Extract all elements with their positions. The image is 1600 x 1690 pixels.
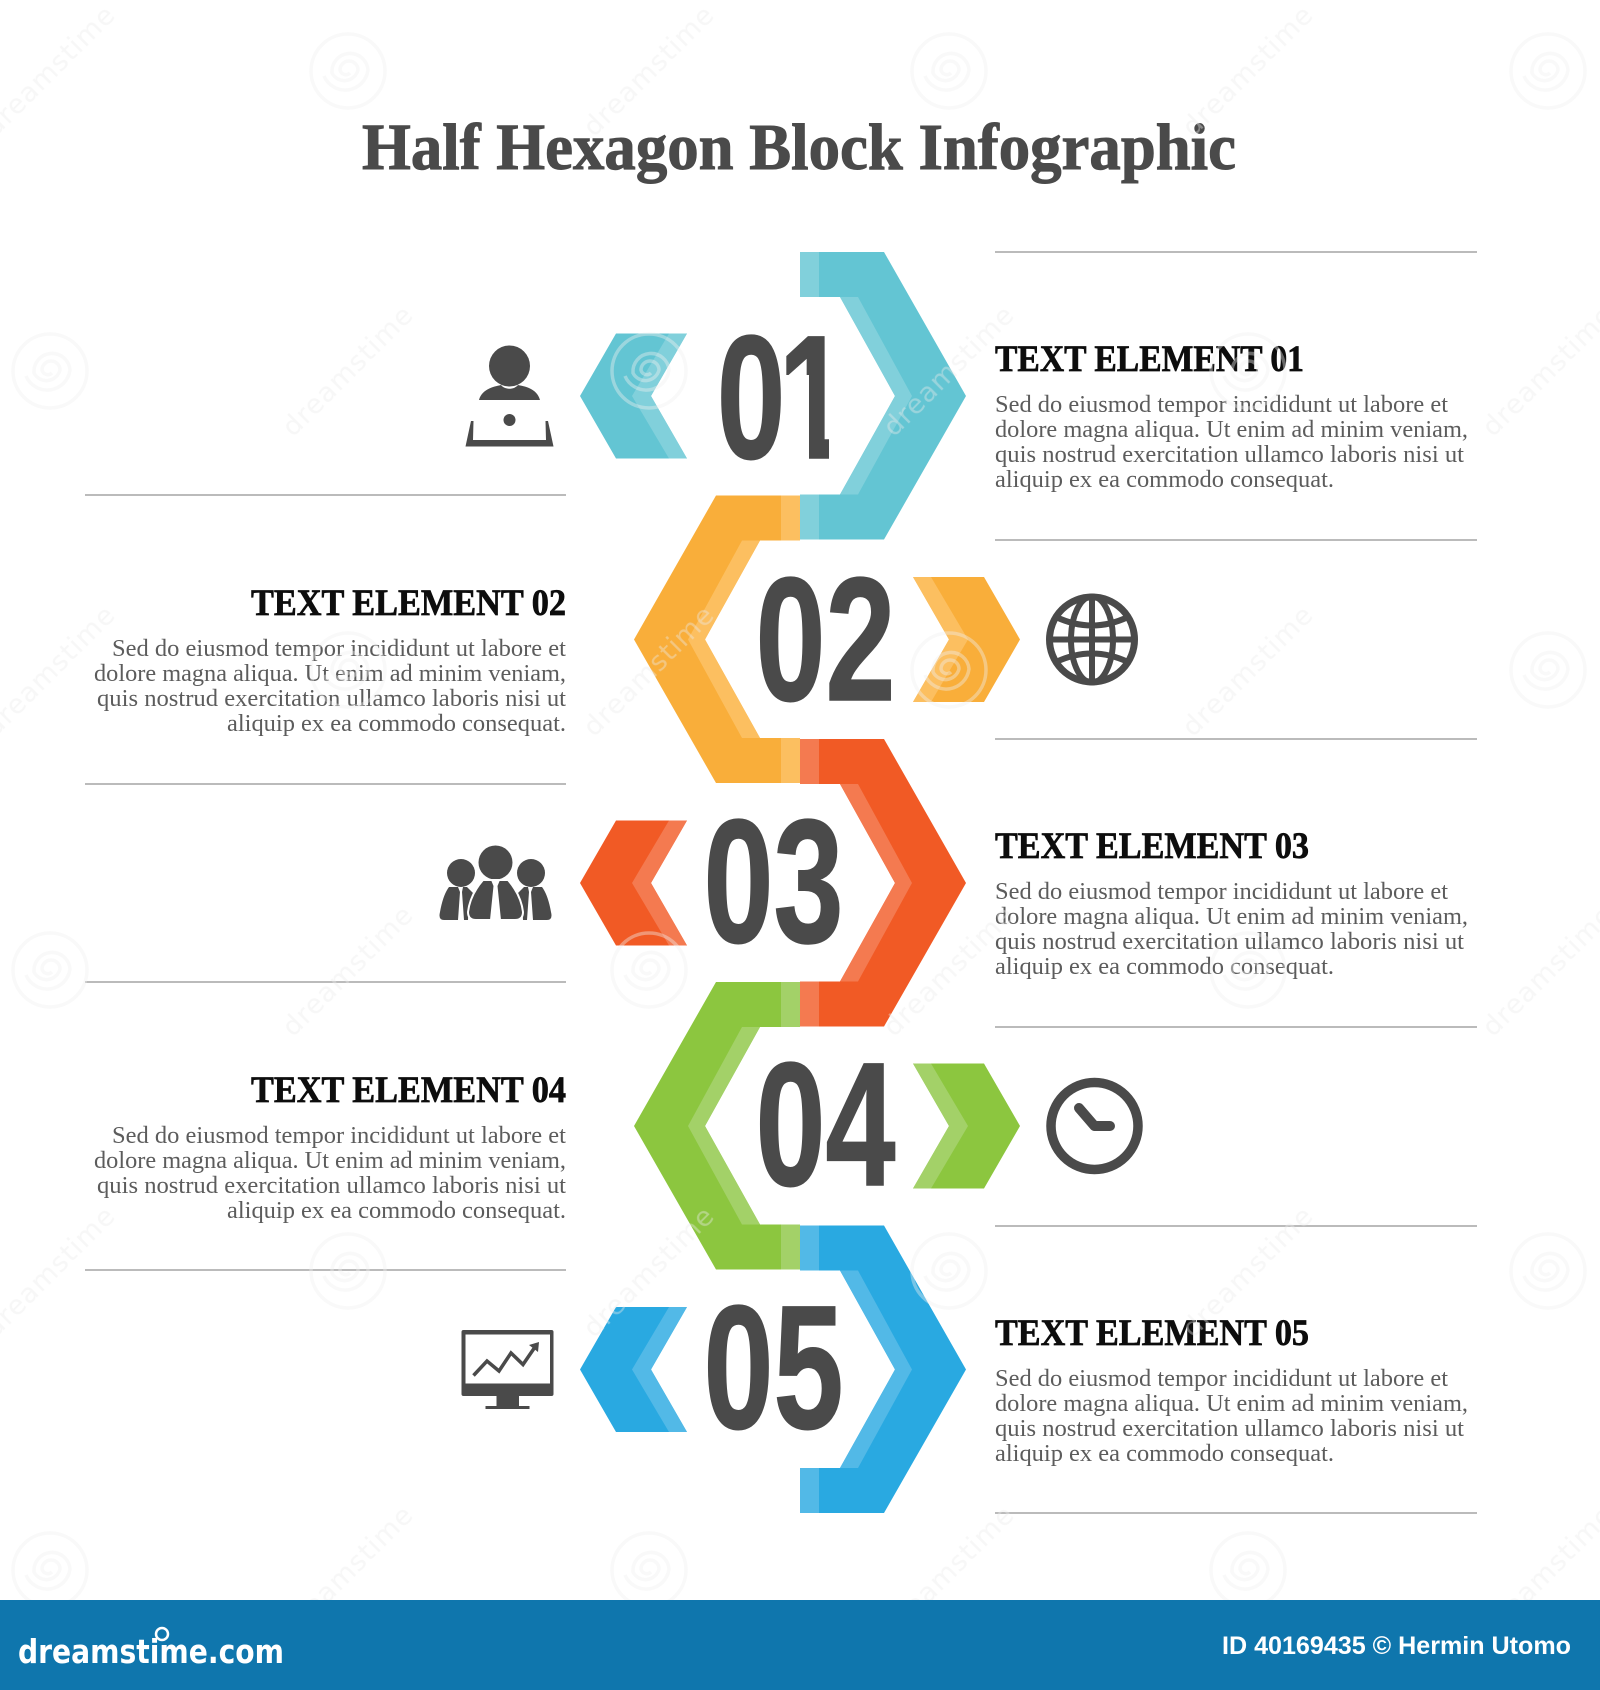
hexagon bracket 04: [634, 982, 800, 1270]
text element 05: aliquip ex ea commodo consequat.: [995, 1441, 1334, 1467]
panel: step 03: [440, 739, 1468, 1026]
text element 04: Sed do eiusmod tempor incididunt ut labore et: [112, 1123, 566, 1149]
text element 01: quis nostrud exercitation ullamco laboris nisi ut: [995, 442, 1464, 468]
text element 04: aliquip ex ea commodo consequat.: [227, 1198, 566, 1224]
text element 02: [94, 583, 566, 737]
text element 03: Sed do eiusmod tempor incididunt ut labore et: [995, 879, 1448, 905]
number 04: 04: [756, 1027, 895, 1223]
text element 03: TEXT ELEMENT 03: [995, 826, 1309, 867]
text element 02: quis nostrud exercitation ullamco laboris nisi ut: [97, 686, 566, 712]
text element 03: quis nostrud exercitation ullamco laboris nisi ut: [995, 929, 1464, 955]
text element 05: Sed do eiusmod tempor incididunt ut labore et: [995, 1366, 1448, 1392]
icon: monitor with chart: [462, 1330, 554, 1409]
text element 04: quis nostrud exercitation ullamco laboris nisi ut: [97, 1173, 566, 1199]
watermark text: dreamstime: [877, 899, 1021, 1043]
title: Half Hexagon Block Infographic: [362, 111, 1236, 184]
watermark text: dreamstime: [577, 1200, 721, 1344]
number 01: [717, 299, 853, 496]
chevron 04: [913, 1064, 1020, 1188]
footer credit: ID 40169435 © Hermin Utomo: [1222, 1632, 1571, 1660]
icon: business team: [440, 846, 552, 920]
text element 01: dolore magna aliqua. Ut enim ad minim veniam,: [995, 417, 1468, 443]
text element 02: dolore magna aliqua. Ut enim ad minim veniam,: [94, 661, 566, 687]
hexagon bracket 05: [800, 1226, 966, 1513]
watermark text: dreamstime: [1176, 1200, 1320, 1344]
text element 03: aliquip ex ea commodo consequat.: [995, 954, 1334, 980]
chevron 02: [913, 577, 1020, 702]
text element 02: TEXT ELEMENT 02: [251, 583, 566, 624]
text element 03: dolore magna aliqua. Ut enim ad minim veniam,: [995, 904, 1468, 930]
chevron 05: [580, 1307, 687, 1432]
text element 05: TEXT ELEMENT 05: [995, 1313, 1309, 1354]
hexagon bracket 02: [634, 496, 800, 783]
text element 01: aliquip ex ea commodo consequat.: [995, 467, 1334, 493]
watermark text: dreamstime: [877, 1499, 1021, 1643]
text element 01: [995, 339, 1468, 493]
watermark text: dreamstime: [1176, 599, 1320, 743]
text element 03: [995, 826, 1468, 980]
hexagon bracket 01: [800, 252, 966, 540]
watermark text: dreamstime: [577, 0, 721, 143]
text element 01: Sed do eiusmod tempor incididunt ut labore et: [995, 392, 1448, 418]
hexagon bracket 03: [800, 739, 966, 1026]
icon: clock: [1051, 1082, 1138, 1170]
panel: step 01: [466, 252, 1468, 540]
number 02: 02: [756, 542, 895, 738]
panel: step 05: [462, 1226, 1468, 1513]
text element 02: Sed do eiusmod tempor incididunt ut labore et: [112, 636, 566, 662]
text element 04: dolore magna aliqua. Ut enim ad minim veniam,: [94, 1148, 566, 1174]
text element 01: TEXT ELEMENT 01: [995, 339, 1304, 380]
watermark text: dreamstime: [1176, 0, 1320, 143]
watermark text: dreamstime: [276, 899, 420, 1043]
number 03: 03: [704, 784, 843, 980]
text element 02: aliquip ex ea commodo consequat.: [227, 711, 566, 737]
watermark text: dreamstime: [877, 299, 1021, 443]
chevron 03: [580, 820, 687, 946]
text element 05: dolore magna aliqua. Ut enim ad minim veniam,: [995, 1391, 1468, 1417]
number 01: 0: [717, 299, 785, 496]
panel: step 04: [94, 982, 1138, 1270]
footer bar: [0, 1600, 1600, 1690]
panel: step 02: [94, 496, 1135, 783]
text element 04: [94, 1070, 566, 1224]
number 05: 05: [704, 1270, 843, 1466]
icon: globe: [1049, 596, 1135, 683]
watermark text: dreamstime: [276, 299, 420, 443]
chevron 01: [580, 334, 687, 458]
footer logo: dreamstime.com: [18, 1632, 284, 1671]
text element 04: TEXT ELEMENT 04: [251, 1070, 566, 1111]
text element 05: [995, 1313, 1468, 1467]
icon: person with laptop: [466, 346, 554, 446]
watermark text: dreamstime: [577, 599, 721, 743]
watermark text: dreamstime: [276, 1499, 420, 1643]
text element 05: quis nostrud exercitation ullamco laboris nisi ut: [995, 1416, 1464, 1442]
number 01: 1: [778, 299, 847, 496]
